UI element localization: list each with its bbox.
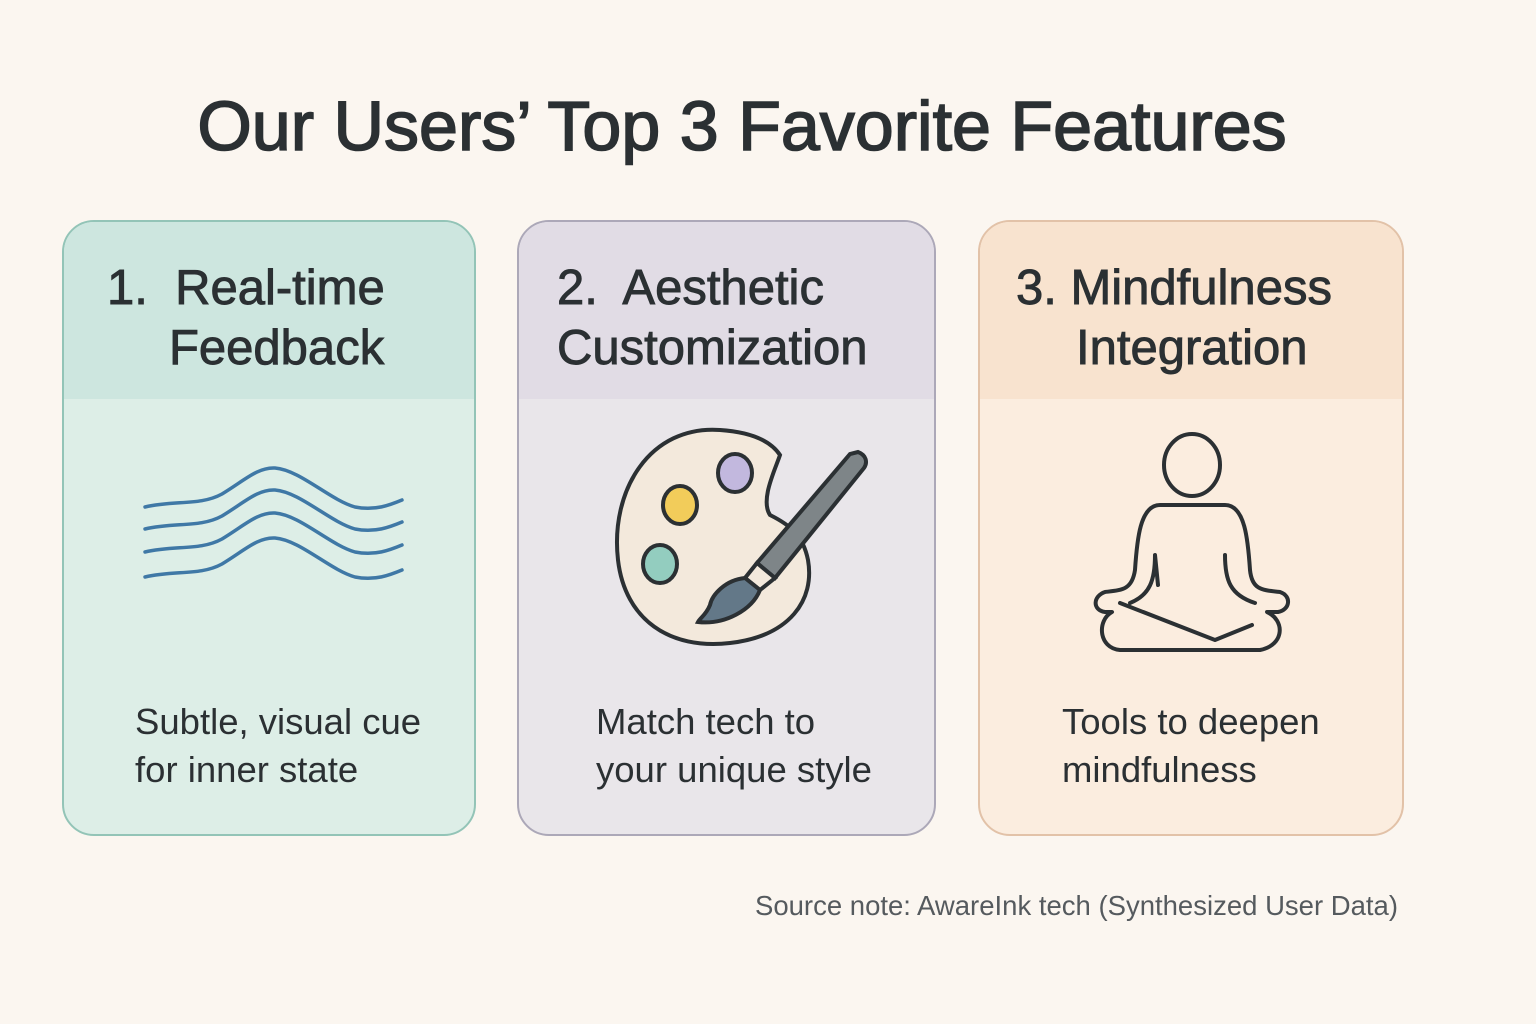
text: feature 1 xyxy=(135,701,421,790)
heading 3 xyxy=(1016,261,1332,375)
text: feature 2: Match tech to xyxy=(596,701,815,742)
text: feature 3: mindfulness xyxy=(1062,749,1257,790)
text: feature 2 xyxy=(596,701,872,790)
heading 1 xyxy=(107,261,386,375)
heading 2: Customization xyxy=(557,321,867,375)
panel: mindfulness integration xyxy=(978,220,1404,836)
text: feature 2: your unique style xyxy=(596,749,872,790)
heading 3: Integration xyxy=(1076,321,1308,375)
source note: Source note: AwareInk tech (Synthesized User Data) xyxy=(755,890,1398,921)
text: feature 1: for inner state xyxy=(135,749,358,790)
text: feature 3 xyxy=(1062,701,1320,790)
panel: aesthetic customization xyxy=(517,220,936,836)
text: feature 3: Tools to deepen xyxy=(1062,701,1320,742)
heading 1: 1. Real-time xyxy=(107,261,385,315)
heading 2 xyxy=(557,261,867,375)
panel: real-time feedback xyxy=(62,220,476,836)
heading 2: 2. Aesthetic xyxy=(557,261,824,315)
text: feature 1: Subtle, visual cue xyxy=(135,701,421,742)
heading 3: 3. Mindfulness xyxy=(1016,261,1332,315)
title: Our Users’ Top 3 Favorite Features xyxy=(197,87,1287,165)
heading 1: Feedback xyxy=(169,321,384,375)
